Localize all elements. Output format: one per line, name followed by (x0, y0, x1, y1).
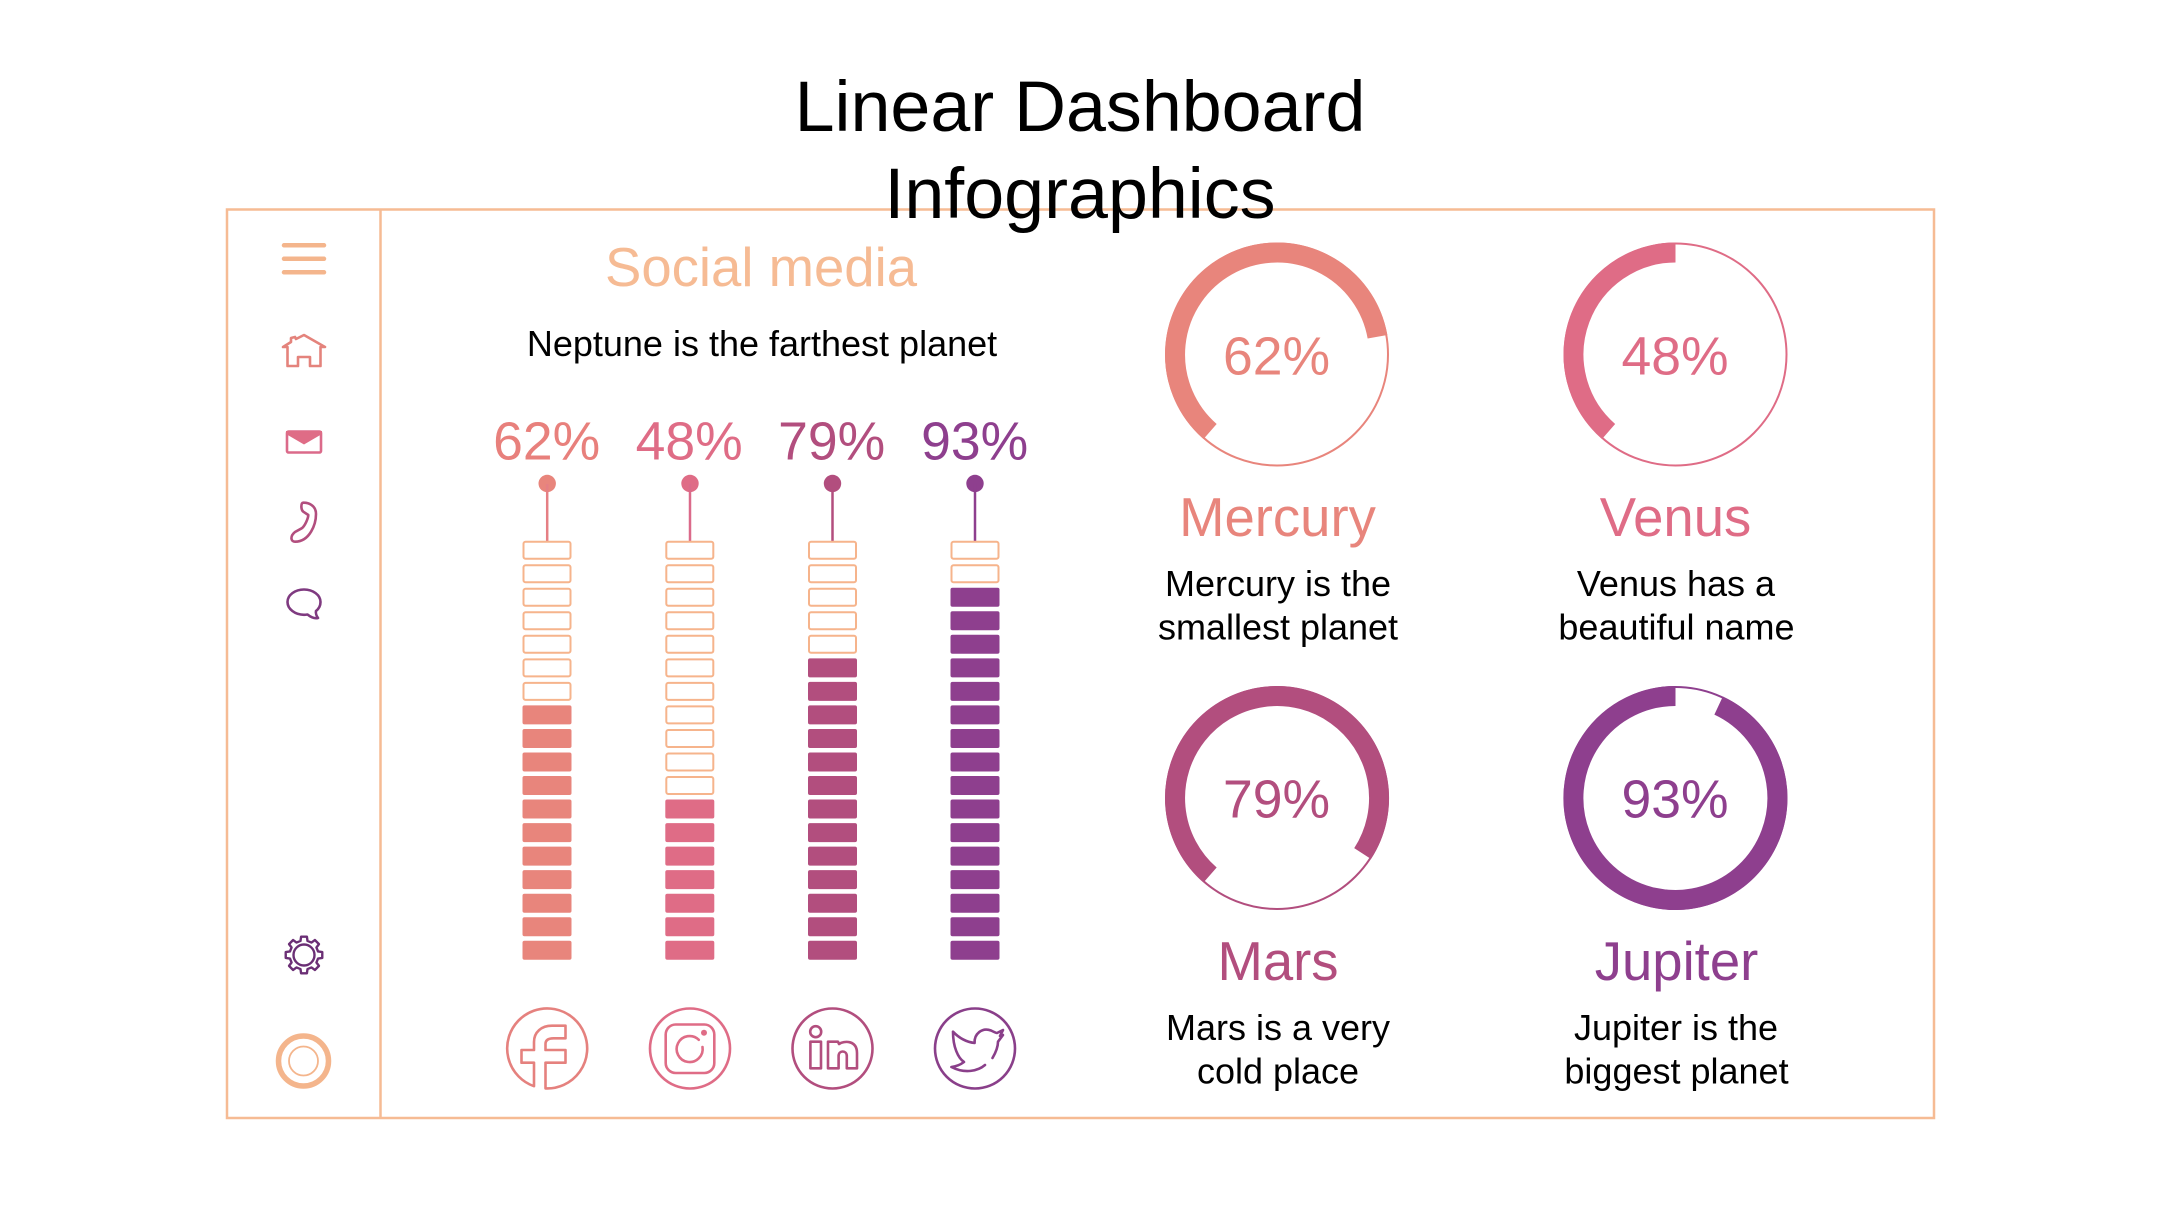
description: Jupiter is the (1574, 1007, 1778, 1048)
icon: twitter (935, 1008, 1015, 1088)
description (1166, 1007, 1390, 1092)
description: Mercury is the (1165, 563, 1391, 604)
pins (538, 475, 984, 541)
donut value: 93% (1621, 770, 1729, 830)
panel: Mars (1166, 687, 1390, 1092)
text: social media subtitle: Neptune is the farthest planet (527, 323, 997, 364)
heading: social media: Social media (605, 237, 918, 298)
panel: Mercury (1158, 244, 1398, 648)
title: Infographics (884, 154, 1276, 234)
description: cold place (1197, 1050, 1359, 1092)
bar: 93% column (950, 542, 1000, 960)
description: biggest planet (1564, 1050, 1789, 1092)
dashboard frame (227, 210, 1934, 1118)
bar: 48% column (665, 542, 714, 960)
description: Mars is a very (1166, 1007, 1390, 1048)
percentage labels: 62% (493, 412, 600, 472)
icon: chat bubble (288, 590, 320, 618)
icon: mail (286, 431, 322, 452)
donut: 79% (1166, 687, 1388, 909)
percentage labels: 93% (921, 412, 1028, 472)
percentage labels (493, 412, 1028, 472)
description (1564, 1007, 1789, 1092)
panel: social media columns (493, 412, 1028, 1088)
panel: Venus (1558, 244, 1795, 648)
description: smallest planet (1158, 606, 1398, 648)
icon: phone (291, 503, 316, 542)
title (795, 67, 1365, 234)
bar: 62% column (522, 542, 572, 960)
donut value: 62% (1223, 328, 1330, 386)
panel: Jupiter (1564, 687, 1789, 1092)
donut: 48% (1564, 244, 1786, 466)
panel: sidebar navigation (278, 245, 328, 1086)
description (1558, 563, 1795, 648)
donut: 62% (1166, 244, 1388, 466)
icon: home (283, 335, 325, 366)
icon: target button (278, 1036, 328, 1086)
icon: instagram (650, 1008, 730, 1088)
planet name: Mercury (1179, 487, 1377, 548)
bar: 79% column (808, 542, 857, 960)
icon: menu (284, 245, 324, 272)
donut value: 48% (1621, 328, 1729, 386)
description: beautiful name (1558, 606, 1795, 648)
planet name: Jupiter (1595, 931, 1758, 992)
description (1158, 563, 1398, 648)
donut value: 79% (1223, 770, 1330, 830)
icon: linkedin (792, 1008, 872, 1088)
percentage labels: 48% (636, 412, 743, 472)
donut: 93% (1564, 687, 1786, 909)
percentage labels: 79% (778, 412, 885, 472)
icon: settings gear (286, 937, 322, 973)
title: Linear Dashboard (795, 67, 1365, 147)
planet name: Venus (1600, 487, 1751, 548)
icon: facebook (507, 1008, 587, 1088)
description: Venus has a (1577, 563, 1776, 604)
planet name: Mars (1217, 931, 1339, 992)
